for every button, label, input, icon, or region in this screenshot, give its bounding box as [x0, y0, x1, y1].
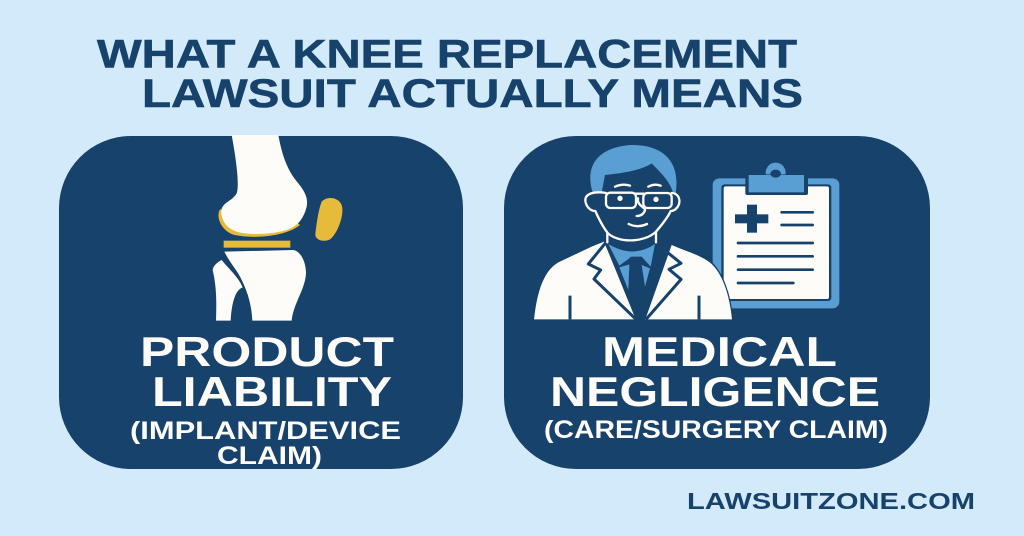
title: LAWSUIT ACTUALLY MEANS: [142, 72, 803, 116]
icon: clipboard: [713, 163, 839, 308]
title: [97, 32, 803, 116]
website label: LAWSUITZONE.COM: [687, 488, 975, 514]
panel heading: medical negligence: [550, 328, 880, 415]
panel: product liability: [59, 135, 463, 470]
panel heading: product liability: [140, 328, 394, 415]
panel heading: product liability: PRODUCT: [140, 328, 394, 375]
doctor tie: [629, 257, 645, 319]
panel: medical negligence: [504, 136, 930, 469]
icon: knee implant: [213, 135, 342, 321]
icon: doctor: [534, 145, 732, 319]
panel subtext: implant/device claim: CLAIM): [217, 442, 322, 470]
title: WHAT A KNEE REPLACEMENT: [97, 32, 797, 76]
panel heading: product liability: LIABILITY: [152, 368, 392, 415]
panel heading: medical negligence: MEDICAL: [602, 328, 837, 375]
panel heading: medical negligence: NEGLIGENCE: [550, 368, 880, 415]
panel subtext: care/surgery claim: (CARE/SURGERY CLAIM): [544, 416, 888, 444]
panel subtext: implant/device claim: [130, 417, 401, 470]
panel subtext: implant/device claim: (IMPLANT/DEVICE: [130, 417, 401, 445]
